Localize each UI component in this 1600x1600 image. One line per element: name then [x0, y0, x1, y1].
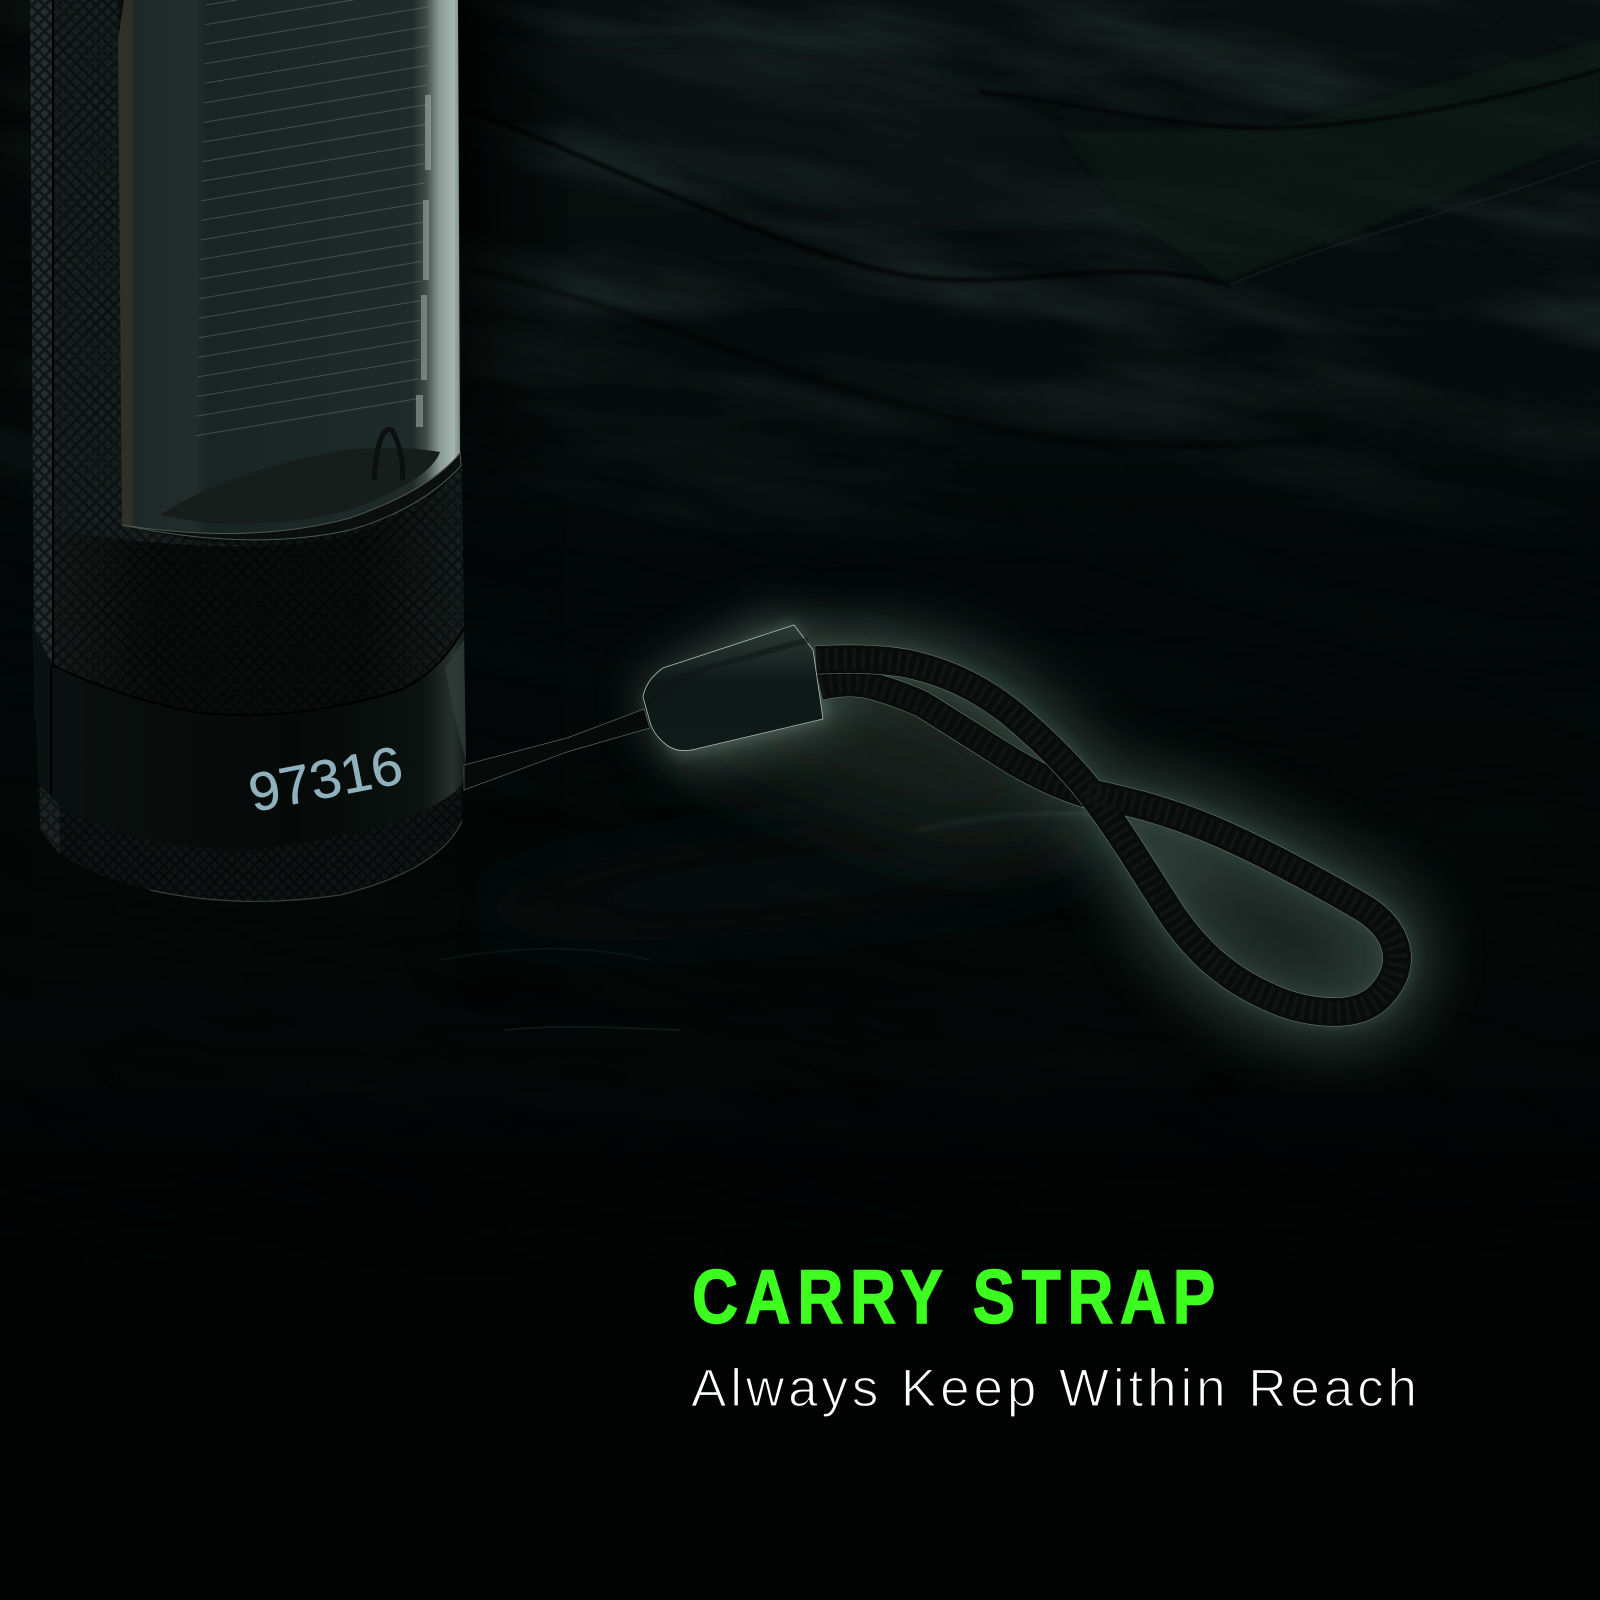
- inner base shadow: [160, 430, 440, 524]
- end band: [32, 623, 466, 850]
- strap: lower strand: [820, 683, 1095, 797]
- cord lock toggle: [643, 625, 823, 751]
- body: knurled grip: [30, 0, 465, 720]
- title: CARRY STRAP: [692, 1254, 1215, 1339]
- glass window: [118, 0, 461, 540]
- glow behind strap: [640, 610, 1397, 1012]
- glass reflection marks: [416, 95, 431, 427]
- subtitle: Always Keep Within Reach: [691, 1359, 1417, 1418]
- solar panel lines: [190, 0, 440, 450]
- base cap: [38, 785, 462, 901]
- background: dark stone texture: [0, 0, 1600, 1031]
- carry strap loop: [816, 659, 1397, 1012]
- engraved number: 97316: [244, 735, 407, 824]
- flashlight body: [30, 0, 466, 901]
- strap: main strand and loop: [816, 659, 1397, 1012]
- thin attachment cord: [464, 709, 650, 790]
